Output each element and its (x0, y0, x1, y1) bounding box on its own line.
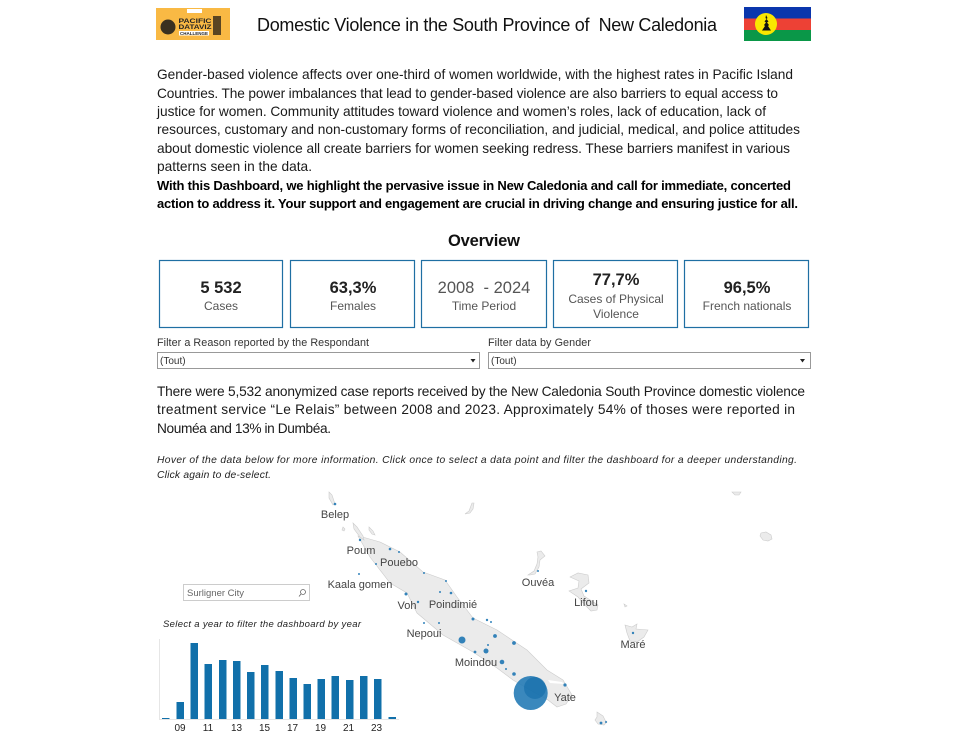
bar chart: cases per year: 11 (203, 723, 214, 734)
filter: gender (488, 337, 810, 368)
instruction note: Click again to de-select. (157, 470, 271, 481)
panel: KPI females: Females (330, 299, 376, 313)
city bubble: Nouméa (514, 676, 548, 710)
main island Grande Terre (358, 536, 572, 707)
map labels (321, 509, 646, 704)
bar chart: cases per year: 23 (371, 723, 382, 734)
panel: KPI time period: Time Period (452, 299, 516, 313)
title: Domestic Violence in the South Province of New Caledonia (257, 15, 718, 35)
summary text block (157, 384, 805, 436)
map labels: Pouebo (380, 557, 418, 569)
intro text block: resources, customary and non-customary forms of reconciliation, and judicial, medical, and police attitudes (157, 122, 800, 137)
map labels: Nepoui (407, 628, 441, 640)
white lagoon streak (548, 680, 564, 684)
intro text block: justice for women. Community attitudes toward violence and women’s roles, lack of education, lack of (156, 104, 766, 119)
panel: KPI cases: Cases (204, 299, 238, 313)
bar chart: cases per year: 09 (174, 723, 186, 734)
bar chart: cases per year: 21 (343, 723, 354, 734)
panel: KPI time period: 2008 - 2024 (438, 279, 530, 297)
intro text block: about domestic violence all create barriers for women seeking redress. These barriers manifest in various (157, 141, 790, 156)
panel: KPI physical violence: 77,7% (593, 271, 640, 289)
year chart heading: Select a year to filter the dashboard by year (163, 619, 362, 630)
panel: KPI females: 63,3% (330, 279, 377, 297)
panel: KPI cases: 5 532 (200, 279, 242, 297)
summary text block: There were 5,532 anonymized case reports received by the New Caledonia South Province domestic violence (157, 384, 805, 399)
filter: gender: Filter data by Gender (488, 337, 591, 349)
northern islets (329, 492, 375, 540)
smaller city bubbles (334, 503, 634, 724)
panel: KPI time period (422, 260, 546, 328)
logo: Pacific Dataviz Challenge: DATAVIZ (178, 24, 212, 31)
map labels: Belep (321, 509, 349, 521)
logo: Pacific Dataviz Challenge (156, 8, 230, 40)
bar chart: cases per year (160, 639, 399, 734)
logo: Pacific Dataviz Challenge: PACIFIC (178, 18, 212, 25)
search box: city highlighter: Surligner City (187, 588, 244, 599)
map labels: Voh (398, 600, 416, 612)
Walpole and eastern islets (465, 492, 772, 607)
search box: city highlighter (184, 584, 310, 600)
map labels: Lifou (574, 597, 598, 609)
intro text block: Gender-based violence affects over one-third of women worldwide, with the highest rates in Pacific Island (157, 67, 793, 82)
Maré (625, 624, 648, 642)
intro text block: Countries. The power imbalances that lead to gender-based violence are also barriers to equal access to (157, 86, 778, 101)
intro text block (156, 67, 800, 211)
Isle of Pines (595, 712, 607, 725)
map labels: Poindimié (429, 599, 477, 611)
Lifou (569, 573, 598, 611)
instruction note: Hover of the data below for more information. Click once to select a data point and filter the dashboard for a deeper understanding. (157, 455, 797, 466)
bar chart: cases per year: 15 (259, 723, 270, 734)
map labels: Yate (554, 692, 576, 704)
panel: KPI French nationals: 96,5% (724, 279, 771, 297)
panel: KPI females (290, 260, 414, 328)
map labels: Kaala gomen (328, 579, 392, 591)
intro text block: action to address it. Your support and engagement are crucial in driving change and ensuring justice for all. (157, 196, 798, 211)
panel: KPI physical violence: Cases of Physical (568, 292, 664, 306)
map labels: Maré (620, 639, 646, 651)
panel: KPI cases (160, 260, 282, 328)
Ouvéa (528, 551, 545, 575)
bar chart: cases per year: 17 (287, 723, 298, 734)
bar chart: cases per year: 13 (231, 723, 242, 734)
instruction note (157, 455, 797, 481)
map labels: Poum (347, 545, 375, 557)
filter: reason (157, 337, 480, 368)
summary text block: treatment service “Le Relais” between 2008 and 2023. Approximately 54% of thoses were reported in (157, 402, 795, 417)
logo: Pacific Dataviz Challenge: CHALLENGE (180, 31, 208, 36)
panel: KPI physical violence (554, 260, 678, 328)
map labels: Moindou (455, 657, 497, 669)
panel: KPI French nationals (684, 260, 808, 328)
panel: KPI French nationals: French nationals (703, 299, 791, 313)
filter: reason: (Tout) (160, 356, 186, 367)
filter: reason: Filter a Reason reported by the Respondant (157, 337, 369, 349)
bar chart: cases per year: 19 (315, 723, 326, 734)
panel: KPI physical violence: Violence (593, 307, 639, 321)
filter: gender: (Tout) (491, 356, 517, 367)
heading: Overview: Overview (448, 232, 520, 250)
icon: New Caledonia flag (744, 7, 811, 41)
map labels: Ouvéa (522, 577, 555, 589)
map of New Caledonia (321, 492, 772, 725)
summary text block: Nouméa and 13% in Dumbéa. (157, 421, 331, 436)
intro text block: patterns seen in the data. (157, 159, 312, 174)
intro text block: With this Dashboard, we highlight the pervasive issue in New Caledonia and call for immediate, concerted (157, 178, 791, 193)
